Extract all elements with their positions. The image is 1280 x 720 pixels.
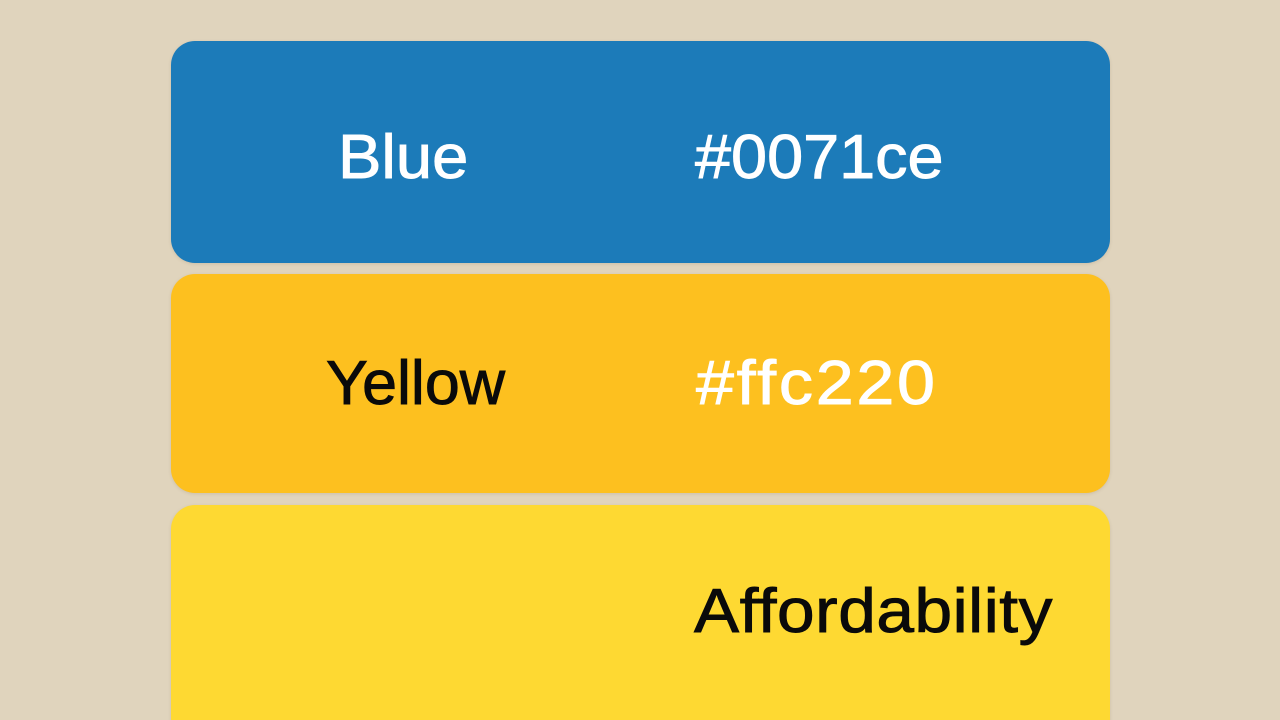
panel: blue swatch <box>171 41 1110 263</box>
label: Affordability: Affordability <box>694 577 1053 646</box>
label: Blue: Blue <box>338 123 468 192</box>
hex code: #0071ce: #0071ce <box>695 123 944 192</box>
panel: light yellow swatch <box>171 505 1110 720</box>
hex code: #ffc220: #ffc220 <box>696 349 938 418</box>
label: Yellow: Yellow <box>326 349 505 418</box>
panel: yellow swatch <box>171 274 1110 493</box>
